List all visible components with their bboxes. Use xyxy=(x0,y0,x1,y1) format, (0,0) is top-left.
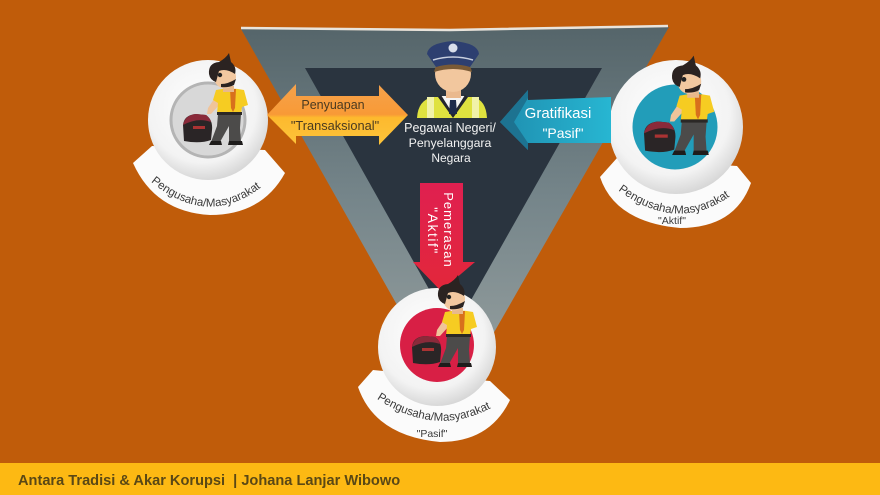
text: officer label xyxy=(404,121,496,165)
arrow: Pemerasan Aktif: Pemerasan xyxy=(441,192,456,268)
panel: bottom actor "Pengusaha/Masyarakat Pasif" xyxy=(358,183,510,442)
arrow: Gratifikasi Pasif xyxy=(500,90,611,150)
arrow: Penyuapan Transaksional xyxy=(267,84,408,145)
arrow: Pemerasan Aktif xyxy=(413,183,475,291)
panel: right actor "Pengusaha/Masyarakat Aktif" xyxy=(600,56,751,228)
label ribbon: left xyxy=(133,146,285,215)
disc: bottom xyxy=(378,288,496,406)
arrow: Penyuapan Transaksional: Penyuapan xyxy=(301,98,365,112)
text: officer label: Penyelanggara xyxy=(409,136,492,150)
disc: left xyxy=(148,60,268,180)
icon: businessman with bag xyxy=(183,53,248,145)
panel: left actor "Pengusaha/Masyarakat" xyxy=(133,53,285,215)
label ribbon: right: "Aktif" xyxy=(658,215,686,227)
arrow: Gratifikasi Pasif: Gratifikasi xyxy=(525,105,591,122)
top edge highlight xyxy=(241,26,668,30)
arrow: Pemerasan Aktif: "Aktif" xyxy=(425,207,441,255)
disc: right xyxy=(609,60,743,194)
label ribbon: bottom: "Pasif" xyxy=(417,428,448,440)
inner circle: teal xyxy=(632,84,718,170)
icon: government officer xyxy=(417,41,487,118)
label ribbon: right: Pengusaha/Masyarakat xyxy=(618,184,730,214)
label ribbon: bottom: Pengusaha/Masyarakat xyxy=(378,392,491,422)
inner circle: red xyxy=(400,308,474,382)
icon: businessman with bag xyxy=(412,275,477,367)
label ribbon: right xyxy=(600,158,751,228)
footer bar xyxy=(0,463,880,495)
inner circle: grey xyxy=(171,83,245,157)
footer text: Antara Tradisi & Akar Korupsi | Johana Lanjar Wibowo xyxy=(18,473,400,489)
panel: outer grey triangle xyxy=(241,27,669,404)
arrow: Gratifikasi Pasif: "Pasif" xyxy=(542,125,584,141)
text: officer label: Pegawai Negeri/ xyxy=(404,121,496,135)
label ribbon: bottom xyxy=(358,370,510,442)
icon: businessman with bag xyxy=(644,56,714,155)
panel: inner dark triangle xyxy=(305,68,602,332)
label ribbon: left: Pengusaha/Masyarakat xyxy=(152,176,261,207)
arrow: Penyuapan Transaksional: "Transaksional" xyxy=(291,118,379,133)
text: officer label: Negara xyxy=(431,151,471,165)
